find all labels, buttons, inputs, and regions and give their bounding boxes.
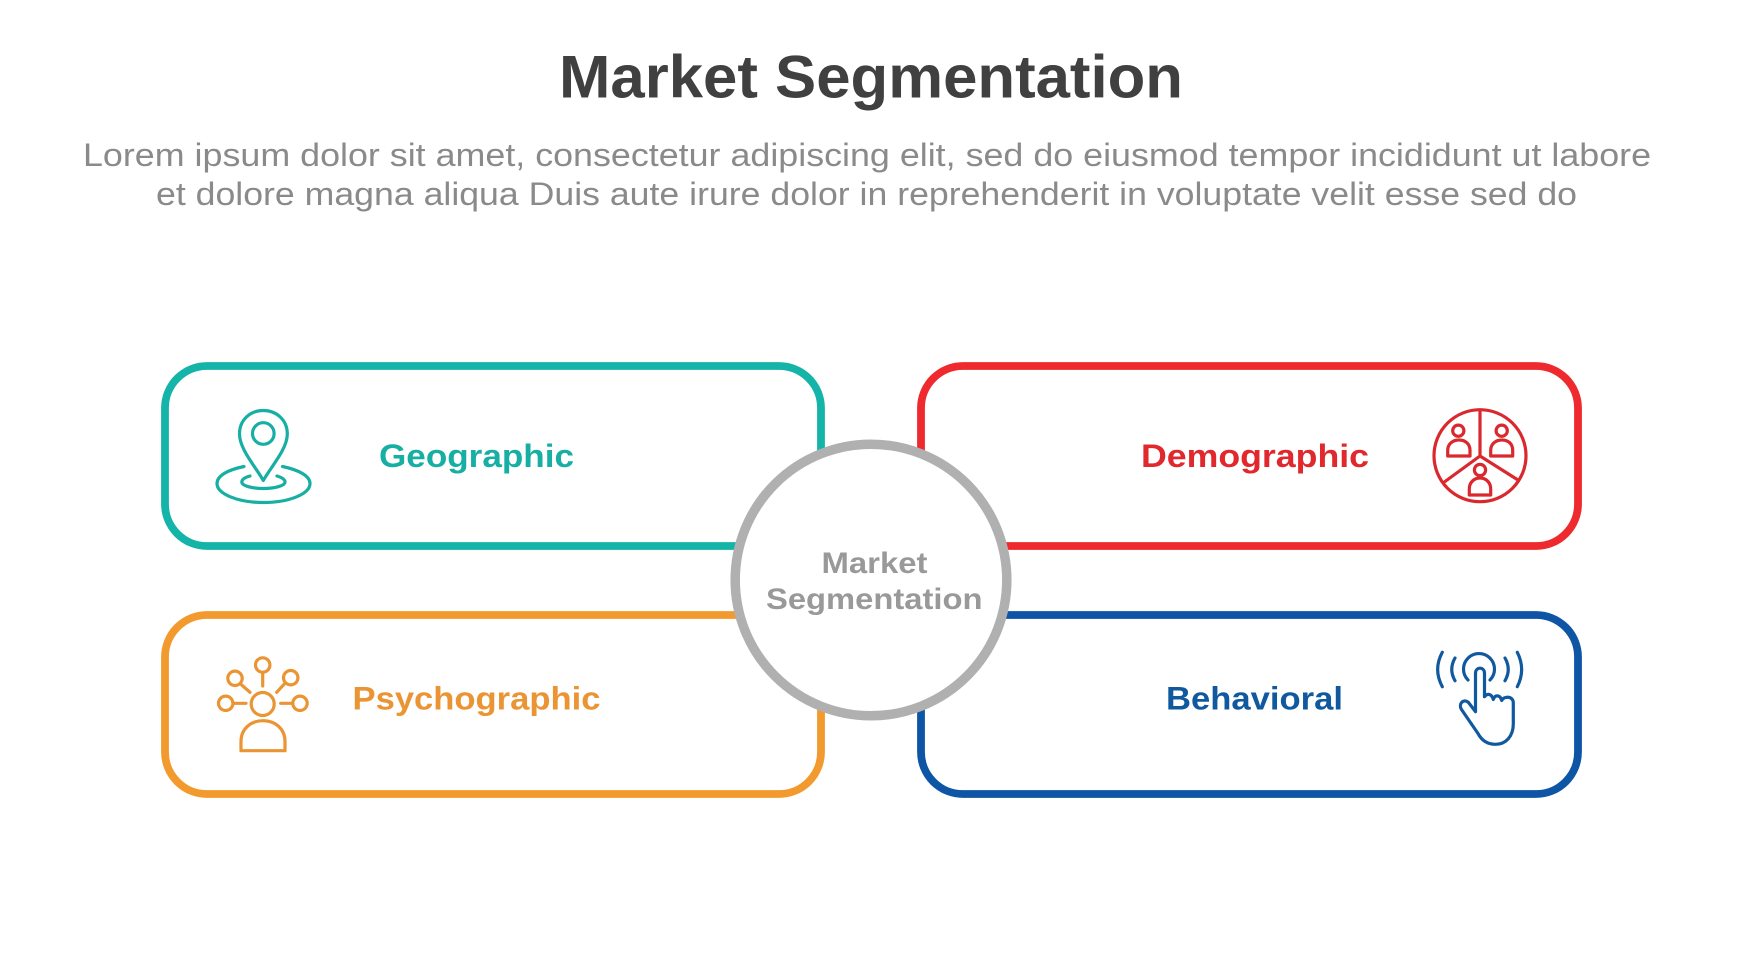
label: Psychographic: Psychographic [352,680,600,716]
subtitle text block: Lorem ipsum dolor sit amet, consectetur adipiscing elit, sed do eiusmod tempor incididunt ut labore [83,137,1651,173]
subtitle text block [83,137,1651,212]
label: Demographic: Demographic [1141,438,1369,474]
icon: population pie [1434,410,1526,502]
panel: demographic [921,366,1578,546]
center label [766,547,982,616]
label: Geographic: Geographic [379,438,574,474]
panel: psychographic [165,615,821,794]
panel: geographic [165,366,821,546]
icon: pointing hand tap [1438,652,1522,744]
icon: person with connected nodes [218,658,307,751]
center circle [735,444,1007,716]
icon: location pin [217,410,310,502]
center label: Segmentation [766,583,982,616]
center label: Market [822,547,928,580]
title: Market Segmentation [559,44,1183,110]
panel: behavioral [921,615,1578,794]
subtitle text block: et dolore magna aliqua Duis aute irure dolor in reprehenderit in voluptate velit esse sed do [156,176,1577,212]
label: Behavioral: Behavioral [1166,680,1343,716]
